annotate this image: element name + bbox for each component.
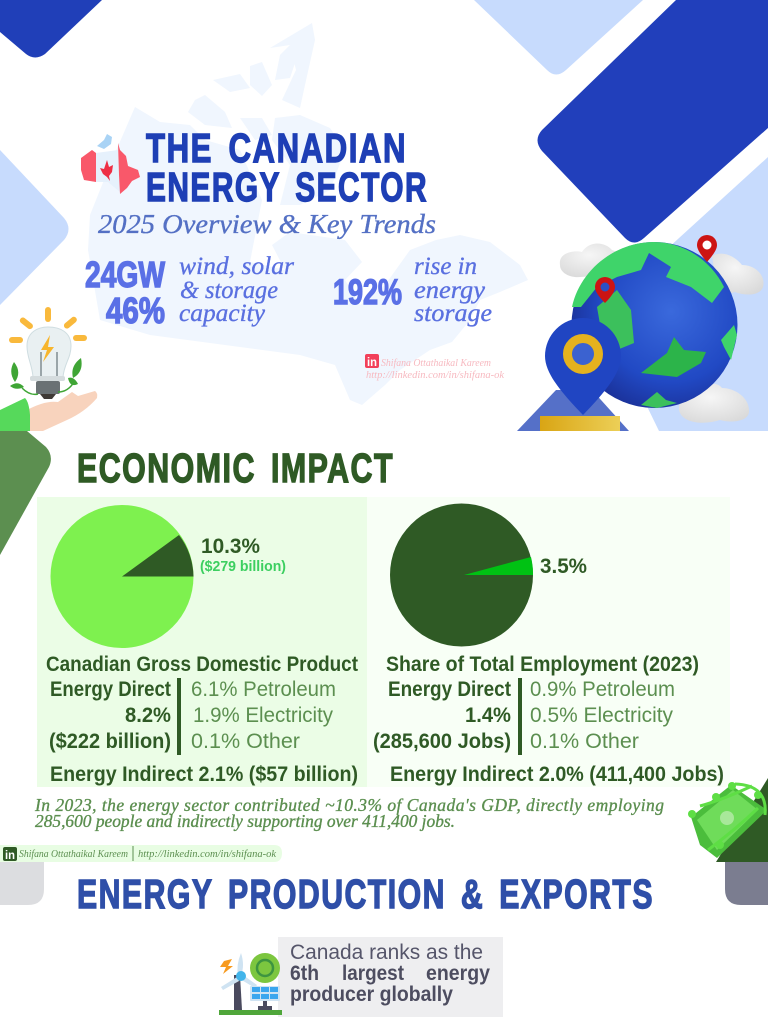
icon: Canada flag map [81, 134, 140, 194]
top header background shapes [0, 0, 768, 431]
callout: global ranking: largest [342, 962, 404, 985]
panel: employment [367, 497, 730, 787]
callout: global ranking: energy [426, 962, 490, 985]
label: 10.3% [200, 535, 286, 575]
energy indirect: GDP: Energy Indirect 2.1% ($57 billion) [50, 763, 358, 786]
panel: GDP [37, 497, 367, 787]
energy direct figures: GDP: Energy Direct [50, 678, 171, 701]
title [146, 125, 428, 210]
breakdown: GDP: 6.1% Petroleum [191, 678, 336, 701]
illustration: globe with pins and clouds [517, 235, 763, 431]
author credit: strip [0, 845, 282, 862]
icon: light bulb on hand [0, 307, 97, 431]
stat: 24GW 46% capacity: wind, solar [179, 253, 294, 280]
energy direct figures: employment: Energy Direct [388, 678, 511, 701]
stat: 24GW 46% capacity: capacity [179, 300, 266, 327]
author credit: header: in [367, 355, 377, 369]
author credit: header [365, 354, 504, 381]
energy direct figures: GDP [49, 678, 171, 753]
stat: 192% energy storage: rise in [414, 253, 477, 280]
pie chart: employment share [390, 504, 533, 646]
breakdown: employment [530, 678, 675, 753]
author credit: header: Shifana Ottathaikal Kareem [381, 358, 491, 369]
breakdown: employment: 0.9% Petroleum [530, 678, 675, 701]
energy direct figures: employment [373, 678, 511, 753]
author credit: strip: http://linkedin.com/in/shifana-ok [138, 849, 276, 860]
label: 10.3%: 10.3% [201, 535, 260, 558]
author credit: header: http://linkedin.com/in/shifana-ok [366, 370, 504, 381]
energy direct figures: GDP: ($222 billion) [49, 730, 171, 753]
stat: 192% energy storage: storage [414, 300, 492, 327]
stat: 192% energy storage: 192% [333, 273, 402, 312]
background Canada map silhouette [88, 23, 528, 405]
icon: wind turbine and solar panel [219, 953, 282, 1015]
summary text: 285,600 people and indirectly supporting over 411,400 jobs. [35, 811, 455, 831]
subtitle: 2025 Overview & Key Trends [98, 209, 436, 239]
energy direct figures: employment: (285,600 Jobs) [373, 730, 511, 753]
author credit: strip: Shifana Ottathaikal Kareem [19, 849, 128, 860]
stat: 24GW 46% capacity: 46% [106, 290, 165, 331]
stat: 192% energy storage [333, 253, 492, 327]
energy direct figures: employment: 1.4% [465, 704, 511, 727]
author credit: strip: in [5, 848, 15, 862]
breakdown: employment: 0.1% Other [530, 730, 639, 753]
green corner shape [0, 431, 51, 555]
heading: GDP: Canadian Gross Domestic Product [46, 653, 358, 676]
bottom corner shapes [0, 862, 768, 905]
breakdown: GDP [191, 678, 336, 753]
title: THE CANADIAN [146, 125, 407, 171]
breakdown: GDP: 1.9% Electricity [193, 704, 333, 727]
breakdown: employment: 0.5% Electricity [530, 704, 673, 727]
breakdown: GDP: 0.1% Other [191, 730, 300, 753]
callout: global ranking: Canada ranks as the [290, 941, 483, 964]
heading: employment: Share of Total Employment (2023) [386, 653, 699, 676]
energy direct figures: GDP: 8.2% [125, 704, 171, 727]
label: 10.3%: ($279 billion) [200, 558, 286, 575]
summary text [34, 795, 664, 831]
icon: money with vines [688, 782, 767, 858]
heading: economic impact: ECONOMIC IMPACT [77, 445, 394, 491]
stat: 192% energy storage: energy [414, 277, 486, 304]
callout: global ranking [278, 937, 503, 1017]
summary text: In 2023, the energy sector contributed ~10.3% of Canada's GDP, directly employing [34, 795, 664, 815]
callout: global ranking: producer globally [290, 983, 453, 1006]
stat: 24GW 46% capacity [85, 253, 294, 331]
pie chart: GDP share [50, 505, 194, 648]
dark green corner triangle [716, 778, 768, 862]
energy indirect: employment: Energy Indirect 2.0% (411,400 Jobs) [390, 763, 724, 786]
title: ENERGY SECTOR [146, 164, 428, 210]
stat: 24GW 46% capacity: & storage [180, 277, 278, 304]
stat: 24GW 46% capacity: 24GW [85, 254, 165, 295]
callout: global ranking: 6th [290, 962, 319, 985]
label: 3.5%: 3.5% [540, 555, 587, 578]
